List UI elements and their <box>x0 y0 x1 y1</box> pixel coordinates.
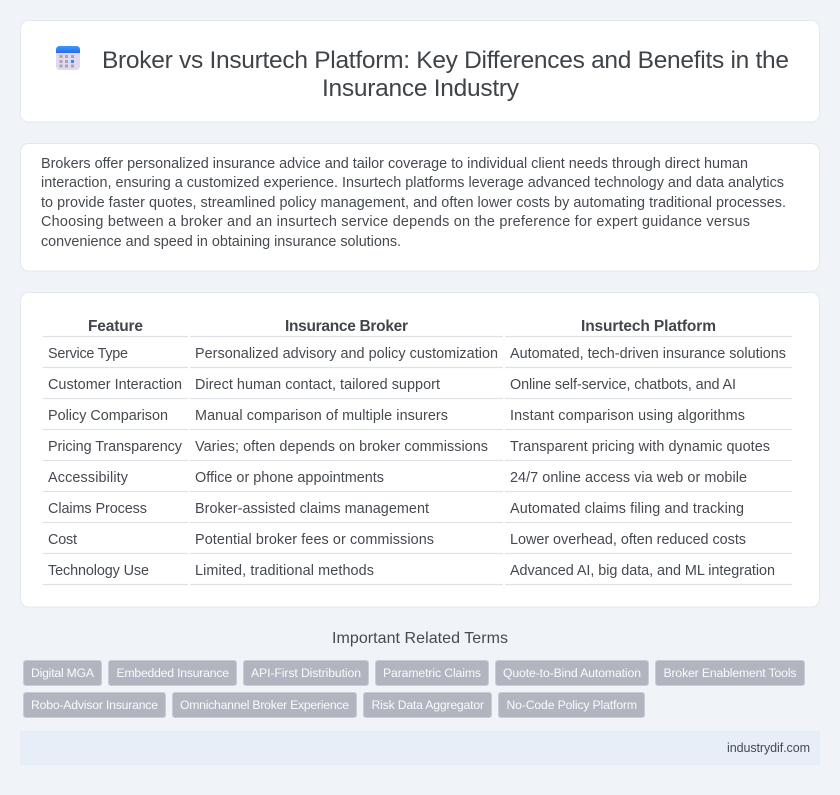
table row: cost <box>43 532 792 554</box>
tag cloud <box>24 660 804 718</box>
title: Insurance Industry <box>322 75 520 102</box>
tag: Robo-Advisor Insurance <box>24 692 166 718</box>
table row: cost: Cost <box>48 532 77 548</box>
table row: customer interaction: Direct human contact, tailored support <box>195 377 440 393</box>
tag: Omnichannel Broker Experience: Omnichannel Broker Experience <box>180 698 349 712</box>
tag: Robo-Advisor Insurance: Robo-Advisor Insurance <box>31 698 158 712</box>
table row: service type <box>43 346 792 368</box>
panel: comparison table <box>20 292 820 607</box>
tag: Parametric Claims <box>376 660 488 686</box>
title: Broker vs Insurtech Platform: Key Differences and Benefits in the <box>102 47 789 74</box>
tag: Embedded Insurance <box>108 660 236 686</box>
tag: Broker Enablement Tools: Broker Enablement Tools <box>664 666 796 680</box>
table row: technology use: Technology Use <box>48 563 149 579</box>
table row: service type: Service Type <box>48 346 128 362</box>
tag: Digital MGA: Digital MGA <box>31 666 95 680</box>
table row: accessibility: Office or phone appointments <box>195 470 384 486</box>
table row: service type: Personalized advisory and policy customization <box>195 346 498 362</box>
table row: claims process <box>43 501 792 522</box>
table row: pricing transparency: Pricing Transparency <box>48 439 183 455</box>
tag: Digital MGA <box>24 660 102 686</box>
text block: summary <box>41 156 786 250</box>
tag: Quote-to-Bind Automation: Quote-to-Bind Automation <box>503 666 641 680</box>
tag: Omnichannel Broker Experience <box>172 692 356 718</box>
table row: pricing transparency: Transparent pricing with dynamic quotes <box>510 439 770 455</box>
table row: customer interaction: Customer Interaction <box>48 377 182 393</box>
table row: policy comparison: Manual comparison of multiple insurers <box>195 408 448 424</box>
text block: summary: interaction, ensuring a customized experience. Insurtech platforms leverage advanced technology and data analytics <box>41 175 784 191</box>
text block: summary: to provide faster quotes, streamlined policy management, and often lower costs by automating traditional processes. <box>41 195 786 211</box>
table row: pricing transparency <box>43 439 792 460</box>
panel: title header <box>20 20 820 122</box>
tag: No-Code Policy Platform <box>498 692 644 718</box>
table row: claims process: Automated claims filing and tracking <box>510 501 744 517</box>
footer source: industrydif.com <box>727 741 810 755</box>
icon: calendar <box>56 46 80 70</box>
table row: policy comparison: Policy Comparison <box>48 408 168 424</box>
table row: policy comparison: Instant comparison using algorithms <box>510 408 745 424</box>
tag: No-Code Policy Platform: No-Code Policy Platform <box>506 698 637 712</box>
tag: Broker Enablement Tools <box>656 660 804 686</box>
table header row: Feature <box>88 318 143 335</box>
title <box>102 47 789 102</box>
table header row <box>43 318 792 336</box>
table row: technology use <box>43 563 792 584</box>
table row: claims process: Claims Process <box>48 501 147 517</box>
table row: claims process: Broker-assisted claims management <box>195 501 429 517</box>
table header row: Insurtech Platform <box>581 318 716 335</box>
tag: Quote-to-Bind Automation <box>496 660 648 686</box>
table row: accessibility: Accessibility <box>48 470 129 486</box>
table row: service type: Automated, tech-driven insurance solutions <box>510 346 786 362</box>
table row: policy comparison <box>43 408 792 430</box>
tag: Parametric Claims: Parametric Claims <box>383 666 481 680</box>
table row: cost: Lower overhead, often reduced costs <box>510 532 746 548</box>
tag: API-First Distribution: API-First Distribution <box>251 666 361 680</box>
text block: summary: Choosing between a broker and an insurtech service depends on the preference for expert guidance versus <box>41 214 750 230</box>
table row: pricing transparency: Varies; often depends on broker commissions <box>195 439 488 455</box>
table row: accessibility <box>43 470 792 492</box>
heading: important related terms: Important Related Terms <box>332 630 508 647</box>
footer bar <box>20 731 820 765</box>
table row: customer interaction <box>43 377 792 398</box>
text block: summary: Brokers offer personalized insurance advice and tailor coverage to individual client needs through direct human <box>41 156 748 172</box>
table row: accessibility: 24/7 online access via web or mobile <box>510 470 747 486</box>
tag: API-First Distribution <box>244 660 368 686</box>
table header row: Insurance Broker <box>285 318 408 335</box>
table row: technology use: Limited, traditional methods <box>195 563 374 579</box>
text block: summary: convenience and speed in obtaining insurance solutions. <box>41 234 401 250</box>
panel: summary paragraph <box>20 144 820 271</box>
tag: Risk Data Aggregator <box>364 692 492 718</box>
table row: technology use: Advanced AI, big data, and ML integration <box>510 563 775 579</box>
tag: Embedded Insurance: Embedded Insurance <box>116 666 229 680</box>
table row: cost: Potential broker fees or commissions <box>195 532 434 548</box>
table row: customer interaction: Online self-service, chatbots, and AI <box>510 377 736 393</box>
tag: Risk Data Aggregator: Risk Data Aggregator <box>372 698 484 712</box>
